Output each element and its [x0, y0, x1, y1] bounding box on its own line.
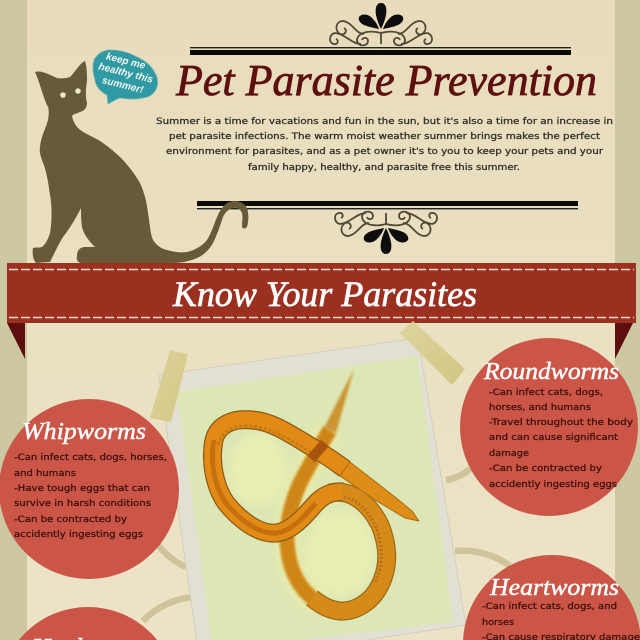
tape left: [150, 350, 188, 422]
photo of roundworm: [159, 338, 466, 640]
title: Pet Parasite Prevention: [175, 56, 597, 105]
banner heading: Know Your Parasites: [172, 274, 477, 314]
photo frame: [159, 338, 466, 640]
intro text: family happy, healthy, and parasite free this summer.: [248, 163, 520, 173]
worm: [212, 369, 419, 611]
banner ribbon: [7, 263, 636, 359]
cat eyes: [60, 88, 81, 98]
list: Roundworms: -Can be contracted by: [489, 464, 603, 474]
right ribbon fold: [615, 323, 633, 359]
circle: Roundworms: [460, 338, 638, 516]
left ribbon fold: [7, 323, 25, 359]
intro text: Summer is a time for vacations and fun in the sun, but it's also a time for an increase in: [156, 117, 613, 127]
list: Whipworms: accidently ingesting eggs: [14, 530, 143, 540]
bubble text: [97, 51, 154, 96]
intro text: environment for parasites, and as a pet owner it's to you to keep your pets and your: [166, 147, 603, 157]
list: Roundworms: horses, and humans: [489, 403, 591, 413]
list: Whipworms: -Can be contracted by: [14, 515, 128, 525]
connector stems: [143, 469, 510, 621]
intro text: [156, 117, 613, 173]
bottom rule: [197, 201, 578, 209]
heading: Roundworms: Roundworms: [483, 359, 619, 385]
list: Roundworms: [489, 388, 634, 490]
circle: Whipworms: [0, 399, 179, 579]
list: Whipworms: survive in harsh conditions: [14, 499, 151, 509]
list: Roundworms: -Can infect cats, dogs,: [489, 388, 603, 398]
list: Whipworms: and humans: [14, 469, 76, 479]
list: Heartworms: horses: [482, 618, 514, 628]
heading: Whipworms: Whipworms: [22, 419, 146, 445]
circle: Hookworms: [0, 607, 177, 640]
top rule: [190, 47, 571, 55]
cat silhouette: [33, 61, 248, 263]
top ornament: [330, 3, 432, 45]
list: Heartworms: [482, 602, 640, 640]
list: Roundworms: damage: [489, 449, 529, 459]
list: Whipworms: -Have tough eggs that can: [14, 484, 150, 494]
bubble text: healthy this: [97, 62, 154, 86]
list: Roundworms: accidently ingesting eggs: [489, 480, 617, 490]
list: Roundworms: and can cause significant: [489, 433, 619, 443]
bottom ornament: [335, 212, 437, 254]
tape right: [400, 321, 465, 385]
list: Whipworms: -Can infect cats, dogs, horses,: [14, 453, 167, 463]
intro text: pet parasite infections. The warm moist weather summer brings makes the perfect: [169, 132, 601, 142]
speech bubble: [93, 50, 158, 104]
photo area: [177, 356, 453, 640]
list: Roundworms: -Travel throughout the body: [489, 418, 634, 428]
circle: Heartworms: [463, 555, 640, 640]
list: Heartworms: -Can infect cats, dogs, and: [482, 602, 617, 612]
list: Whipworms: [14, 453, 167, 540]
heading: Heartworms: Heartworms: [489, 575, 619, 601]
bubble text: summer!: [101, 75, 145, 96]
bubble text: keep me: [105, 51, 147, 72]
